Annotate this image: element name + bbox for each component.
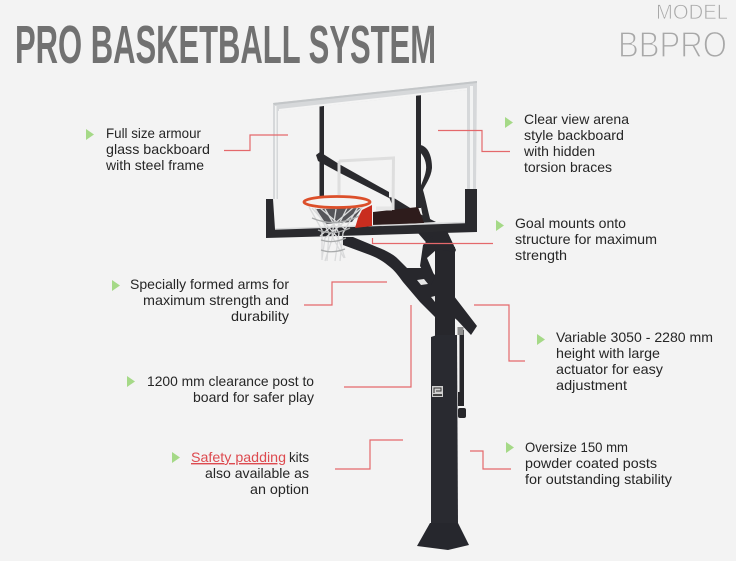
callout connector lines <box>224 130 525 469</box>
glass backboard frame <box>273 81 477 199</box>
callout: oversize posts <box>506 439 672 487</box>
callout: clearance post: board for safer play <box>193 389 314 405</box>
callout: safety padding: Safety padding <box>191 449 286 465</box>
rim <box>304 196 370 208</box>
hoop net <box>309 205 365 261</box>
callout: arms <box>112 276 289 324</box>
arm <box>343 231 477 338</box>
backboard braces <box>316 94 436 226</box>
callout: clearance post <box>127 373 314 405</box>
callout: oversize posts: for outstanding stability <box>525 471 672 487</box>
callout: torsion braces: with hidden <box>523 143 595 159</box>
net shadow <box>316 208 362 224</box>
actuator <box>458 327 466 418</box>
callout: backboard: with steel frame <box>105 157 204 173</box>
model label: MODEL <box>656 1 728 24</box>
model label <box>618 1 728 65</box>
logo tag <box>432 386 443 397</box>
callout: torsion braces <box>505 111 629 175</box>
callout: clearance post: 1200 mm clearance post to <box>147 373 314 389</box>
red rim bracket <box>355 205 372 228</box>
callout: goal mounts: strength <box>515 247 567 263</box>
callout: safety padding <box>172 449 309 497</box>
callout: height adjustment: adjustment <box>556 377 627 393</box>
title: PRO BASKETBALL SYSTEM <box>15 15 436 75</box>
callout: arms: Specially formed arms for <box>130 276 289 292</box>
lower frame <box>266 189 477 238</box>
callout: goal mounts <box>496 215 657 263</box>
callout: backboard <box>86 125 210 173</box>
callout: arms: maximum strength and <box>143 292 289 308</box>
callout: torsion braces: style backboard <box>524 127 624 143</box>
callout: oversize posts: Oversize 150 mm <box>525 439 628 455</box>
callout: height adjustment <box>537 329 713 393</box>
callout: safety padding: kits <box>289 449 309 465</box>
callout: height adjustment: height with large <box>556 345 660 361</box>
callout: backboard: glass backboard <box>106 141 210 157</box>
callout: safety padding: an option <box>250 481 309 497</box>
callout: oversize posts: powder coated posts <box>525 455 657 471</box>
callout: height adjustment: actuator for easy <box>556 361 663 377</box>
callout: goal mounts: Goal mounts onto <box>515 215 626 231</box>
post padding <box>431 335 458 524</box>
arm holes <box>417 279 428 285</box>
callout: safety padding: also available as <box>205 465 309 481</box>
callout: torsion braces: torsion braces <box>524 159 612 175</box>
callout: torsion braces: Clear view arena <box>524 111 629 127</box>
callout: backboard: Full size armour <box>106 125 201 141</box>
basketball system product illustration <box>266 81 477 550</box>
callout: height adjustment: Variable 3050 - 2280 mm <box>556 329 713 345</box>
callout: goal mounts: structure for maximum <box>515 231 657 247</box>
shooter square <box>339 158 394 210</box>
post base <box>417 523 469 550</box>
callout: arms: durability <box>231 308 289 324</box>
